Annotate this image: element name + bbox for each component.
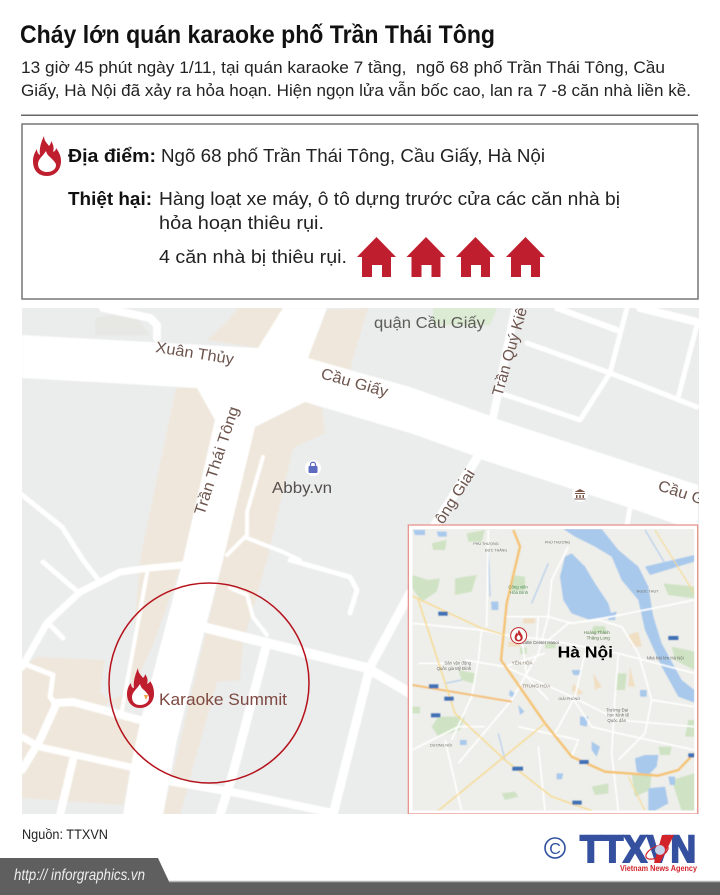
inset place labels: học Kinh tế — [607, 713, 630, 718]
inset place labels: NGỌC THỤY — [637, 590, 659, 594]
label: Xuân Thủy: Xuân Thủy — [154, 339, 235, 368]
logo: TTXVN: Vietnam News Agency — [620, 864, 697, 873]
inset place labels — [430, 539, 684, 748]
map blocks and roads — [22, 300, 698, 815]
icon: museum pin — [572, 489, 588, 502]
label: Cống Giai: ông Giai — [432, 466, 479, 527]
inset place labels: GIẢI PHÓNG — [558, 696, 580, 701]
icon: four houses — [357, 237, 545, 277]
label: Abby.vn: Abby.vn — [272, 480, 332, 497]
inset place labels: Sân vận động — [444, 661, 472, 666]
inset fire marker — [511, 628, 527, 644]
source: Nguồn: TTXVN — [22, 827, 108, 842]
icon: shop pin — [305, 460, 321, 476]
panel: Hanoi inset map — [408, 525, 698, 814]
location label: Địa điểm: — [68, 145, 156, 166]
icon: map flame — [127, 668, 154, 708]
inset place labels: Nhà hát lớn Hà Nội — [647, 655, 684, 660]
title: Cháy lớn quán karaoke phố Trần Thái Tông — [20, 21, 495, 49]
inset place labels: Thăng Long — [587, 635, 610, 640]
intro text: 13 giờ 45 phút ngày 1/11, tại quán karaoke 7 tầng, ngõ 68 phố Trần Thái Tông, Cầu — [21, 58, 665, 77]
damage label: Thiệt hại: — [68, 188, 152, 209]
icon: copyright — [545, 838, 565, 858]
label: quận Cầu Giấy: quận Cầu Giấy — [374, 315, 485, 332]
footer bar — [0, 858, 720, 895]
route shields — [429, 612, 694, 805]
location value: Ngõ 68 phố Trần Thái Tông, Cầu Giấy, Hà Nội — [161, 145, 545, 166]
panel: street map — [22, 297, 720, 815]
inset place labels: Quốc dân — [607, 718, 627, 723]
label: Karaoke Summit: Karaoke Summit — [159, 691, 287, 709]
inset place labels: PHÚ THƯỢNG — [545, 539, 570, 544]
green areas — [412, 530, 694, 811]
inset place labels: Lotte Center Hanoi — [522, 640, 559, 645]
white streets — [412, 530, 694, 811]
intro text — [21, 58, 691, 100]
tan areas — [508, 618, 642, 695]
road labels — [154, 297, 720, 527]
water — [413, 529, 694, 811]
damage text — [159, 188, 620, 267]
intro text: Giấy, Hà Nội đã xảy ra hỏa hoạn. Hiện ngọn lửa vẫn bốc cao, lan ra 7 -8 căn nhà liền kề. — [21, 81, 691, 100]
panel: incident details — [22, 124, 698, 299]
label: Cầu Giấy: Cầu Giấy — [319, 366, 390, 401]
label: Trần Quý Kiên: Trần Quý Kiên — [490, 297, 533, 398]
inset place labels: Công viên — [508, 584, 528, 589]
inset place labels: ĐỨC THẮNG — [485, 548, 507, 553]
inset place labels: TRUNG HÒA — [522, 682, 551, 688]
icon: copyright: C — [549, 841, 561, 858]
damage text: 4 căn nhà bị thiêu rụi. — [159, 246, 347, 267]
inset place labels: PHÚ THƯỢNG — [473, 541, 499, 546]
inset place labels: Quốc gia Mỹ Đình — [437, 666, 472, 671]
label: Trần Thái Tông: Trần Thái Tông — [192, 405, 243, 517]
minor roads — [22, 300, 697, 815]
main roads — [22, 308, 698, 815]
icon: flame — [33, 136, 61, 176]
highways — [412, 530, 694, 811]
logo: TTXVN: TTXVN — [580, 829, 696, 871]
damage text: hỏa hoạn thiêu rụi. — [159, 212, 324, 233]
inset place labels: Hoàng Thành — [584, 630, 610, 635]
location circle — [109, 583, 309, 783]
damage text: Hàng loạt xe máy, ô tô dựng trước cửa các căn nhà bị — [159, 188, 620, 209]
inset place labels: YÊN HÒA — [512, 659, 534, 666]
label: Hà Nội: Hà Nội — [558, 644, 613, 661]
inset place labels: Trường Đại — [606, 707, 628, 712]
website link: http:// inforgraphics.vn — [14, 867, 145, 884]
inset place labels: DƯƠNG NỘI — [430, 743, 452, 748]
thin streams — [445, 530, 665, 760]
inset place labels: Hòa Bình — [510, 590, 529, 595]
tan blocks — [22, 308, 497, 815]
